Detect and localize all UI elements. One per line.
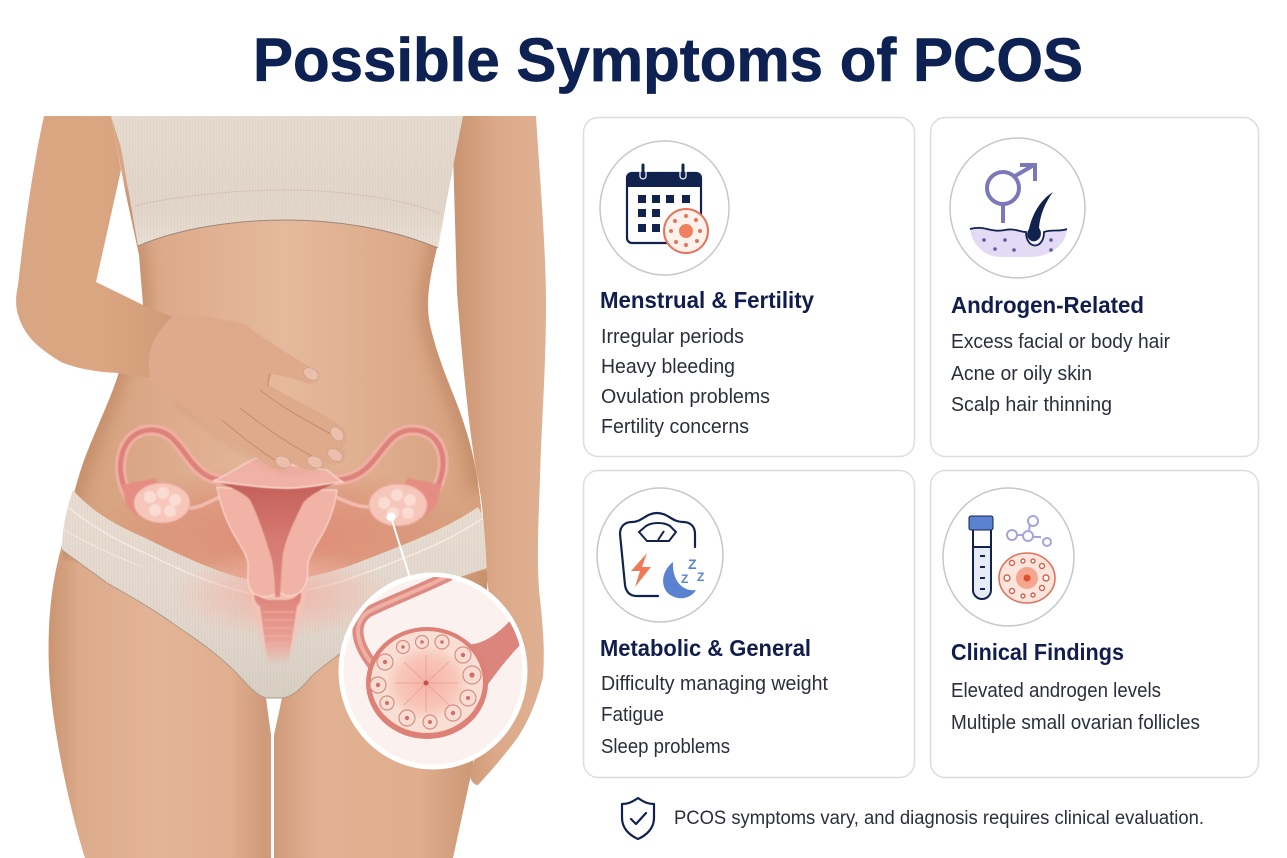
fallopian tubes [121, 430, 443, 508]
torso edge shading [62, 172, 479, 560]
symptom list: Fertility concerns [601, 416, 749, 438]
icon: androgen symbol and hair follicle [950, 138, 1085, 278]
photo: torso with anatomy overlay [16, 116, 546, 858]
vaginal canal with rugae [254, 590, 301, 665]
symptom list: Heavy bleeding [601, 356, 735, 378]
symptom list: Multiple small ovarian follicles [951, 712, 1200, 734]
heading: Clinical Findings [951, 639, 1124, 665]
medulla rays [395, 655, 458, 712]
fingernails [273, 365, 346, 470]
card: Menstrual & Fertility [584, 118, 914, 456]
symptom list [951, 680, 1200, 734]
ovary body [366, 627, 488, 739]
uterus walls [217, 487, 337, 597]
left arm [16, 116, 180, 378]
card: Metabolic & General [584, 470, 914, 778]
symptom list: Elevated androgen levels [951, 680, 1161, 702]
ovaries [134, 483, 190, 523]
symptom list: Ovulation problems [601, 386, 770, 408]
outer vaginal wall [248, 588, 308, 665]
icon: scale, energy bolt and moon: Z [697, 570, 704, 584]
follicles [370, 635, 481, 729]
icon: shield check [622, 798, 654, 839]
hand on abdomen [149, 315, 347, 472]
underwear [62, 490, 487, 698]
uterine fundus [213, 458, 343, 488]
upper torso [62, 116, 488, 600]
footer note with shield icon [622, 798, 1204, 839]
fimbriae [122, 478, 160, 516]
symptom list: Excess facial or body hair [951, 331, 1170, 353]
symptom list [601, 673, 828, 758]
tube and ligaments in inset [358, 576, 448, 664]
legs and hips [49, 450, 488, 858]
inset: ovary cross-section [341, 575, 525, 767]
symptom list [601, 326, 770, 438]
uterine cavity [219, 483, 335, 597]
symptom list: Scalp hair thinning [951, 394, 1112, 416]
icon: scale, energy bolt and moon [597, 488, 723, 622]
heading: Metabolic & General [600, 635, 811, 661]
symptom list: Fatigue [601, 704, 664, 726]
symptom list: Acne or oily skin [951, 363, 1092, 385]
bra [111, 116, 463, 248]
icon: calendar with follicle [600, 141, 729, 275]
symptom list: Sleep problems [601, 736, 730, 758]
belly glow [93, 463, 473, 607]
heading: Menstrual & Fertility [600, 287, 814, 313]
symptom list [951, 331, 1170, 416]
icon: scale, energy bolt and moon: Z [688, 556, 697, 572]
card: Androgen-Related [930, 118, 1258, 456]
heading: Androgen-Related [951, 292, 1144, 318]
title: Possible Symptoms of PCOS [253, 26, 1083, 94]
icon: test tube, molecule and follicle [943, 488, 1074, 626]
icon: scale, energy bolt and moon: Z [681, 572, 688, 586]
reproductive anatomy [121, 430, 443, 665]
symptom list: Difficulty managing weight [601, 673, 828, 695]
leg edge shadow [62, 550, 354, 698]
hand shadow [175, 402, 342, 472]
card: Clinical Findings [930, 470, 1258, 778]
symptom list: Irregular periods [601, 326, 744, 348]
disclaimer: PCOS symptoms vary, and diagnosis requires clinical evaluation. [674, 808, 1204, 829]
right arm and hand [452, 116, 546, 785]
underwear central blush [168, 550, 398, 640]
callout line [386, 512, 410, 578]
